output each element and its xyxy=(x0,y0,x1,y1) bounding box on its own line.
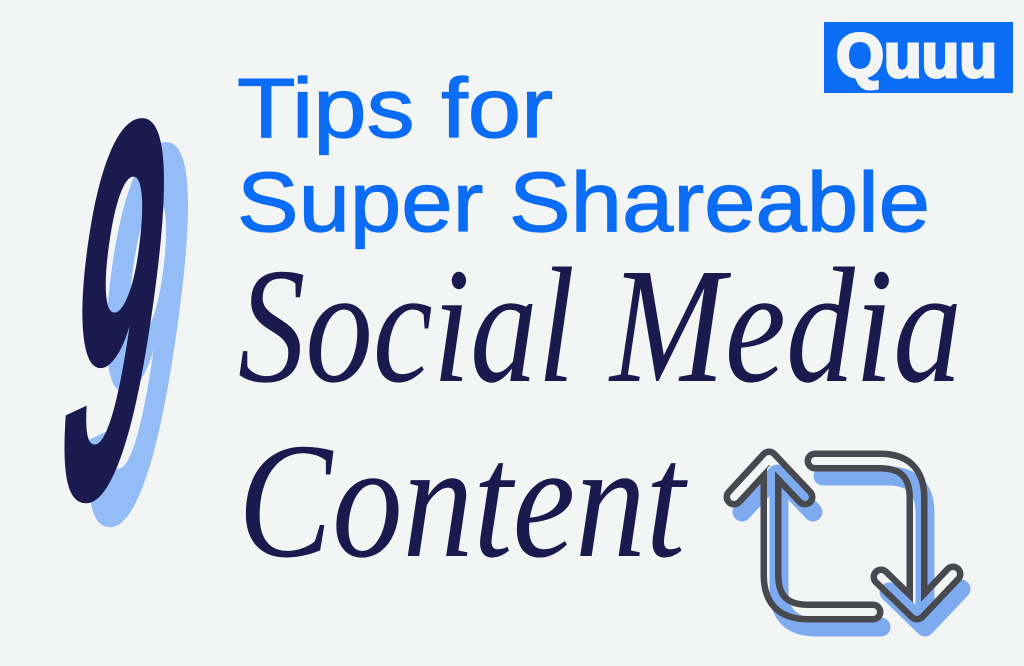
heading: Tips for Super Shareable: Super Shareable xyxy=(237,155,930,249)
heading: Social Media Content: Social xyxy=(238,234,575,417)
heading: Social Media Content: Media xyxy=(608,234,962,417)
numeral 9 with blue offset shadow: 9 xyxy=(55,31,225,638)
logo: Quuu badge: Quuu xyxy=(836,22,997,91)
icon shadow xyxy=(742,474,961,627)
icon outline xyxy=(724,448,964,622)
heading: Social Media Content xyxy=(238,234,962,592)
heading: Tips for Super Shareable xyxy=(237,61,930,249)
numeral 9 with blue offset shadow: 9 xyxy=(31,7,201,614)
icon: retweet arrows xyxy=(724,448,970,636)
heading: Social Media Content: Content xyxy=(238,409,689,592)
heading: Tips for Super Shareable: Tips for xyxy=(237,61,553,155)
